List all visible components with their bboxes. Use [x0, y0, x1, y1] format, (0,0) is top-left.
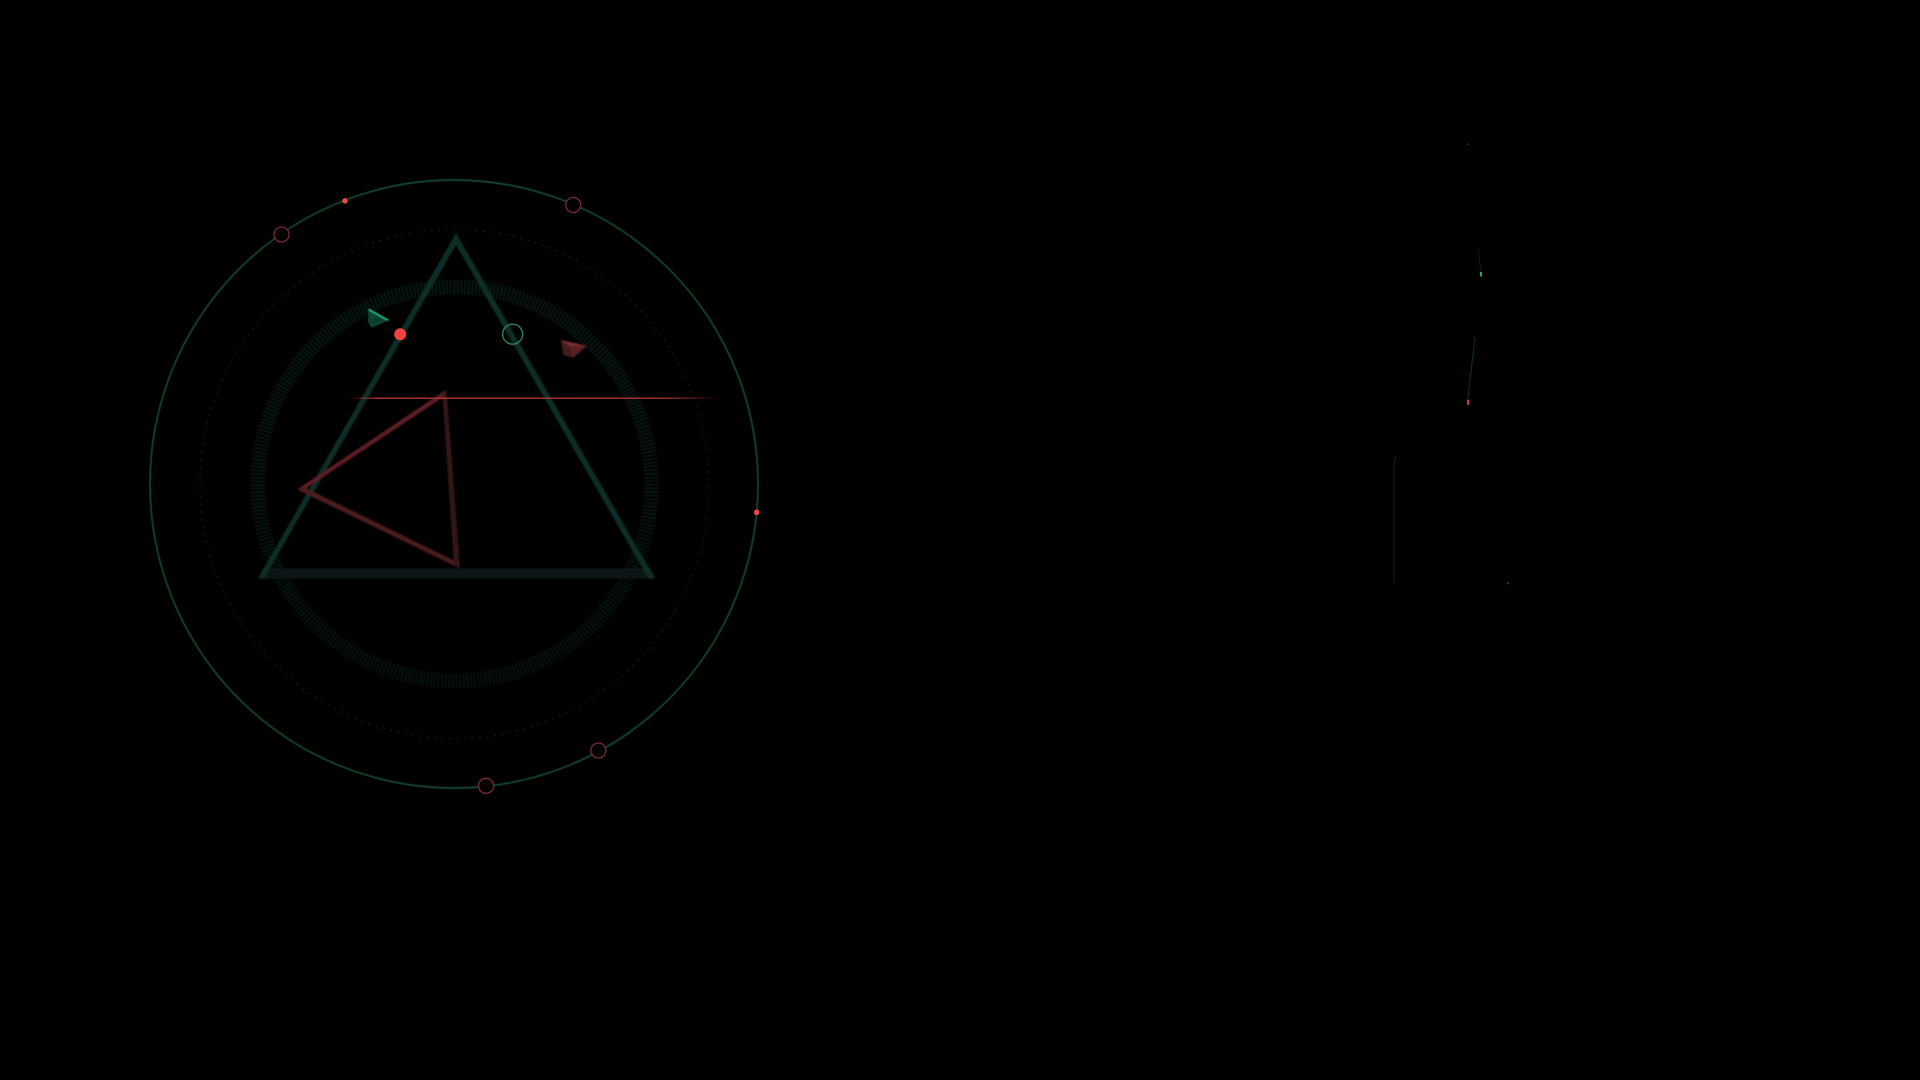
dotted ring: red-tinted arc [675, 357, 709, 611]
green triangle base [258, 568, 655, 578]
gray speck [1467, 144, 1469, 145]
red pyramid icon [561, 340, 587, 358]
dark red speck [1507, 582, 1509, 584]
green ring marker [503, 324, 523, 344]
red ring marker: lower right [591, 743, 606, 758]
dark red vertical trace [1394, 457, 1396, 583]
red horizontal line [348, 398, 720, 399]
red ring marker: upper left [274, 227, 289, 242]
green triangle left edge [258, 233, 456, 578]
red triangle right edge [442, 390, 460, 568]
green triangle [258, 233, 655, 578]
red triangle upper-left edge [297, 390, 446, 490]
right side faint traces [1394, 144, 1509, 584]
red ring marker: upper right [566, 198, 581, 212]
green trace with dot [1478, 250, 1481, 272]
green pyramid icon [368, 308, 389, 328]
hatched inner ring [258, 287, 652, 681]
red triangle [297, 390, 460, 568]
green triangle right edge [456, 233, 655, 578]
red ring marker: bottom [478, 778, 494, 793]
dark green trace with red dot [1468, 337, 1475, 398]
outer orbit circle [150, 180, 758, 788]
small red dot: top of orbit [342, 198, 348, 204]
dotted middle ring [200, 230, 675, 738]
small red dot: right of orbit [754, 510, 760, 515]
red solid dot [394, 328, 406, 340]
red triangle lower-left edge [297, 486, 460, 568]
